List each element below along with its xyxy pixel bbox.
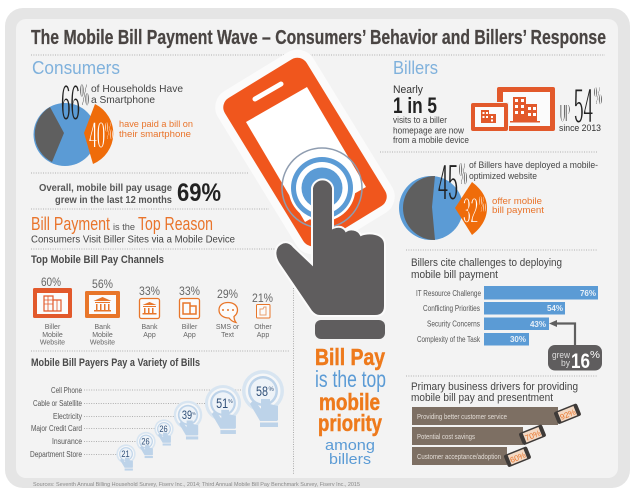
challenges bar chart: Complexity of the Task — [417, 335, 481, 344]
challenges heading: Billers cite challenges to deploying — [411, 257, 562, 269]
hand: 21% — [116, 444, 136, 471]
bill labels: Insurance — [52, 437, 82, 446]
panel: billers: mobile bill pay and presentment — [411, 392, 553, 404]
text: % — [594, 81, 602, 111]
hand: 51%: % — [228, 399, 233, 405]
bill pay statement: mobile — [319, 389, 380, 415]
consumers heading: Consumers — [32, 58, 120, 78]
panel: billers: optimized website — [469, 171, 537, 182]
website text: of Billers have deployed a mobile- — [469, 160, 598, 171]
channel: bank app: Bank — [142, 324, 158, 331]
hand: 39%: % — [192, 411, 196, 416]
hand: 58%: % — [268, 387, 274, 393]
hand: 58%: 58 — [256, 383, 268, 399]
channel: bank app: App — [143, 332, 156, 339]
phone marker: 70% — [518, 424, 546, 446]
offer mobile text: offer mobile — [492, 196, 542, 207]
bill pay statement: among — [325, 437, 375, 454]
channel: biller app — [179, 284, 200, 339]
pie chart: households: 66 — [61, 74, 80, 131]
callout: grew by 16%: 16 — [571, 350, 590, 373]
phone marker: 92% — [553, 403, 581, 425]
channel: biller app: Biller — [182, 324, 198, 331]
channel: other app: 21% — [252, 291, 273, 305]
billers heading: Billers — [393, 58, 438, 78]
nearly 1 in 5: 1 in 5 — [393, 93, 437, 118]
pie chart: billers: 45 — [438, 154, 458, 212]
pie chart: households: % — [80, 77, 89, 113]
panel: billers — [393, 58, 602, 468]
icon: tablets — [470, 87, 555, 132]
challenges bar chart: 43% — [530, 320, 546, 329]
pie chart: households — [34, 74, 113, 166]
channel: bank mobile website: 56% — [92, 277, 113, 291]
challenges bar chart: 54% — [547, 304, 563, 313]
channel: sms: 29% — [217, 287, 238, 301]
drivers chart — [412, 403, 581, 468]
channel: bank mobile website: Bank — [95, 324, 111, 331]
hand: 26% insurance: 26 — [141, 437, 150, 447]
paid a bill text: have paid a bill on — [119, 119, 193, 130]
bill labels: Department Store — [30, 450, 82, 459]
channel: biller mobile website: 60% — [41, 275, 61, 289]
drivers heading: Primary business drivers for providing — [411, 381, 578, 393]
bill labels: Electricity — [53, 412, 82, 421]
channel: biller mobile website: Mobile — [42, 332, 63, 339]
channel: biller mobile website: Website — [40, 340, 65, 346]
panel: consumers: Top Reason — [138, 214, 213, 234]
challenges bar chart: 76% — [580, 289, 596, 298]
phone — [219, 54, 391, 250]
challenges bar chart: Security Concerns — [427, 320, 480, 328]
phone marker: 60%: 60% — [509, 451, 527, 465]
panel: billers: mobile bill payment — [411, 269, 498, 281]
bill pay statement: Bill Pay — [315, 344, 385, 370]
hand: 58% — [242, 370, 284, 427]
sources footnote: Sources: Seventh Annual Billing Household Survey, Fiserv Inc., 2014; Third Annual Mobile Bill Pay Benchmark Survey, Fiserv Inc., 2015 — [33, 482, 360, 488]
phone marker: 70%: 70% — [524, 429, 542, 443]
bill labels — [30, 386, 82, 459]
bills chart — [30, 370, 284, 471]
panel: billers: bill payment — [492, 205, 544, 216]
channel: other app — [252, 291, 273, 339]
channel: sms — [216, 287, 240, 339]
channel: sms: Text — [221, 332, 234, 339]
callout: grew by 16% — [548, 345, 602, 373]
hand: 26% credit card: 26 — [159, 424, 168, 434]
panel: billers: % — [479, 191, 486, 219]
panel: consumers — [30, 58, 284, 471]
pie chart: billers — [399, 154, 487, 240]
nearly 1 in 5: homepage are now — [393, 126, 464, 136]
hand: 26% credit card — [154, 419, 174, 446]
challenges bar chart — [416, 286, 598, 346]
panel: consumers: grew in the last 12 months — [55, 194, 172, 206]
panel: consumers: is the — [113, 222, 135, 232]
channel: biller mobile website — [33, 275, 72, 346]
bill labels: Cell Phone — [51, 386, 82, 395]
bill pay statement: is the top — [315, 366, 386, 392]
pie chart: billers: 32 — [463, 190, 478, 231]
panel: consumers: Consumers Visit Biller Sites via a Mobile Device — [31, 234, 235, 246]
callout: grew by 16%: grew — [552, 350, 570, 360]
phone marker: 60% — [503, 446, 531, 468]
households text: of Households Have — [91, 83, 183, 95]
panel: consumers: a Smartphone — [91, 94, 155, 106]
callout: grew by 16%: % — [590, 350, 600, 361]
channel: bank app: 33% — [139, 284, 160, 298]
bills heading: Mobile Bill Payers Pay a Variety of Bills — [31, 357, 200, 369]
touch rings — [282, 148, 362, 228]
panel: consumers: their smartphone — [119, 129, 191, 140]
pie chart: billers: % — [459, 156, 467, 192]
hand: 21%: 21 — [121, 449, 130, 459]
usage growth: Overall, mobile bill pay usage — [39, 182, 172, 194]
channel: bank app — [139, 284, 160, 339]
bill pay statement — [315, 344, 386, 468]
nearly 1 in 5 — [393, 84, 469, 145]
bill labels: Cable or Satellite — [33, 399, 82, 408]
channel: other app: App — [257, 332, 269, 339]
up 54%: UP — [560, 98, 570, 128]
central phone and hand illustration — [219, 54, 391, 468]
hand: 39%: 39 — [182, 410, 192, 422]
up 54%: 54 — [574, 78, 593, 134]
panel: consumers: 69% — [177, 179, 221, 207]
bill pay statement: billers — [329, 451, 371, 468]
hand: 51%: 51 — [216, 396, 228, 411]
arrow — [556, 324, 575, 346]
bill pay statement: priority — [318, 410, 382, 436]
challenges bar chart: 30% — [510, 335, 526, 344]
up 54% — [559, 78, 602, 134]
channels heading: Top Mobile Bill Pay Channels — [31, 254, 164, 266]
hand: 26% insurance — [136, 432, 156, 458]
phone marker: 92%: 92% — [559, 408, 577, 422]
nearly 1 in 5: Nearly — [393, 84, 423, 96]
channel: bank mobile website: Mobile — [92, 332, 113, 339]
pointing hand — [275, 179, 385, 339]
drivers chart: Providing better customer service — [417, 414, 507, 421]
up 54%: since 2013 — [559, 123, 601, 133]
challenges bar chart: Conflicting Priorities — [423, 304, 480, 313]
drivers chart: Potential cost savings — [417, 434, 475, 441]
arrow head — [549, 320, 557, 327]
top reason heading: Bill Payment — [31, 214, 110, 234]
panel: consumers: % — [105, 116, 113, 146]
hand: 39% — [174, 401, 202, 439]
channel: bank mobile website: Website — [90, 340, 115, 346]
drivers chart: Customer acceptance/adoption — [417, 454, 501, 461]
channel: other app: Other — [254, 324, 272, 331]
challenges bar chart: IT Resource Challenge — [416, 289, 481, 298]
pie chart: households: 40 — [89, 115, 105, 157]
hand: 51% — [205, 385, 241, 434]
nearly 1 in 5: visits to a biller — [393, 115, 447, 125]
channel: biller app: App — [183, 332, 196, 339]
bill labels: Major Credit Card — [31, 424, 82, 433]
channel: biller mobile website: Biller — [45, 324, 61, 331]
channel: sms: SMS or — [216, 324, 240, 331]
channel: biller app: 33% — [179, 284, 200, 298]
callout: grew by 16%: by — [561, 358, 570, 368]
nearly 1 in 5: from a mobile device — [393, 135, 469, 145]
channel: bank mobile website — [85, 277, 120, 346]
